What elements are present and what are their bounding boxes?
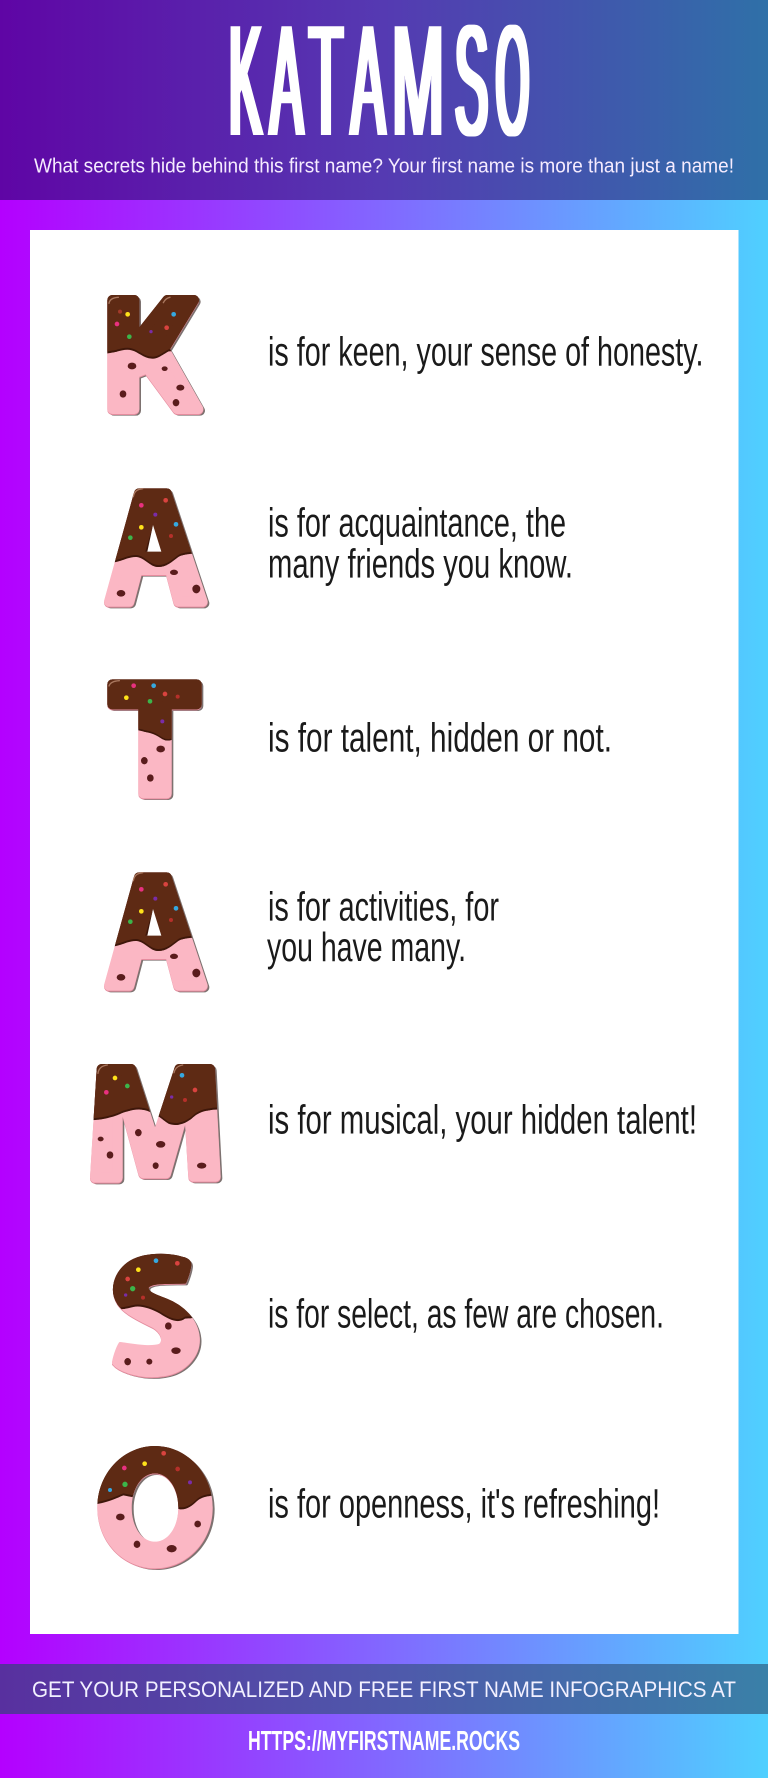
subtitle: What secrets hide behind this first name? Your first name is more than just a name! xyxy=(34,156,734,178)
text: first A meaning xyxy=(268,500,573,586)
icon: chocolate letter S xyxy=(113,1255,200,1378)
text: first A meaning: many friends you know. xyxy=(268,540,573,586)
text: second A meaning: is for activities, for xyxy=(268,884,499,930)
icon: chocolate letter K xyxy=(109,297,200,411)
title xyxy=(229,0,529,169)
icon: chocolate letter O xyxy=(97,1446,215,1570)
icon: chocolate letter T xyxy=(109,681,198,795)
footer band xyxy=(0,1664,768,1714)
icon: chocolate letter M xyxy=(95,1065,217,1179)
icon: second chocolate letter A xyxy=(109,873,204,987)
text: second A meaning xyxy=(267,884,499,970)
footer url: HTTPS://MYFIRSTNAME.ROCKS xyxy=(248,1725,520,1756)
icon: chocolate letter A xyxy=(109,489,204,603)
text: first A meaning: is for acquaintance, the xyxy=(268,500,566,546)
header band xyxy=(0,0,768,200)
text: second A meaning: you have many. xyxy=(267,924,466,970)
panel: letter meanings xyxy=(30,230,738,1634)
text: T meaning: is for talent, hidden or not. xyxy=(268,715,612,761)
